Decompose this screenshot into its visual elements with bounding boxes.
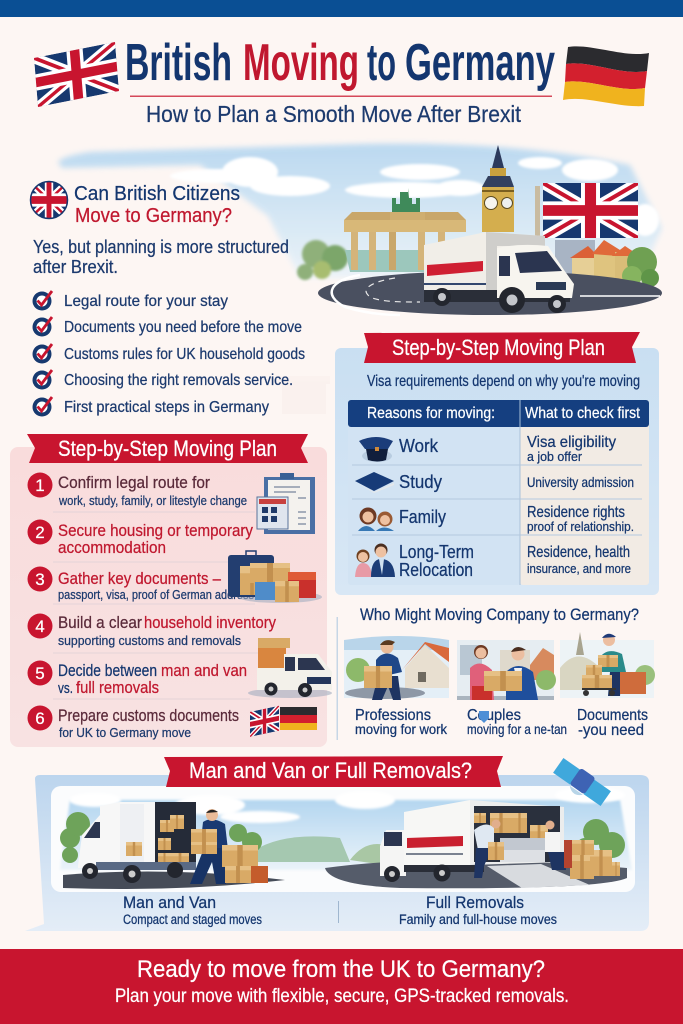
icon: clipboard and calendar (257, 473, 315, 534)
panel: step-by-step moving plan, left (10, 434, 332, 747)
step 2: Secure housing or temporary (58, 521, 253, 540)
ribbon heading: Step-by-Step Moving Plan (58, 436, 277, 461)
ribbon heading: Man and Van or Full Removals? (189, 758, 472, 783)
step 3: 3 (35, 570, 45, 589)
step 6: for UK to Germany move (59, 725, 191, 740)
label: documents (577, 707, 648, 739)
image: couple with box (457, 640, 556, 700)
row: long-term relocation: Long-Term (399, 542, 474, 562)
step 5: man and van (161, 661, 247, 680)
checklist: Customs rules for UK household goods (64, 346, 305, 363)
top bar (0, 0, 683, 17)
hero illustration: landmarks and truck (58, 144, 662, 315)
step 3: Gather key documents – (58, 569, 221, 588)
title text: to (367, 34, 396, 92)
panel: can British citizens move (28, 180, 305, 416)
step 4: supporting customs and removals (58, 633, 241, 648)
row: study (355, 472, 634, 493)
option: man and van (123, 893, 262, 927)
step 1: work, study, family, or litestyle change (58, 493, 247, 508)
label: couples: moving for a ne-tan (467, 721, 567, 737)
label: documents: -you need (578, 722, 644, 739)
step 4: Build a clear (58, 613, 142, 632)
step 3 (28, 566, 254, 602)
footer call to action: Plan your move with flexible, secure, GPS-tracked removals. (115, 986, 569, 1007)
heading: Can British Citizens (74, 183, 240, 205)
step 1 (28, 472, 247, 508)
intro text: after Brexit. (33, 257, 118, 277)
row: family: Residence rights (527, 504, 625, 521)
row: family: Family (399, 507, 446, 527)
step 6: Prepare customs documents (58, 706, 239, 725)
step 2: 2 (35, 523, 45, 542)
step 5: Decide between (58, 661, 157, 680)
faint building watermark (278, 376, 330, 414)
row: long-term relocation: Relocation (399, 560, 473, 580)
heading: Move to Germany? (75, 205, 232, 227)
label: professions (355, 707, 448, 737)
houses and trees right (555, 240, 659, 287)
icon: UK flag (34, 42, 119, 107)
step 4: 4 (35, 617, 45, 636)
icon: suitcase and boxes (228, 551, 322, 603)
icon: German flag (563, 46, 649, 106)
option: full removals (399, 893, 557, 927)
step 6: 6 (35, 709, 45, 728)
panel: who might move (336, 605, 655, 740)
checklist (32, 291, 305, 416)
icon: UK globe (28, 180, 70, 220)
table (348, 400, 649, 585)
footer call to action (0, 949, 683, 1024)
title text: British (125, 34, 232, 92)
title text (125, 34, 555, 92)
footer call to action: Ready to move from the UK to Germany? (137, 956, 545, 983)
icon: UK and German flags (250, 706, 317, 737)
step 4: household inventory (144, 613, 276, 632)
ribbon heading: Step-by-Step Moving Plan (392, 335, 605, 360)
step 1: Confirm legal route for (58, 473, 210, 492)
label: documents: Documents (577, 707, 648, 724)
row: long-term relocation: insurance, and more (527, 561, 631, 576)
intro text: Yes, but planning is more structured (33, 237, 289, 257)
icon: loaded van (248, 638, 332, 698)
step 2 (28, 520, 253, 557)
option: full removals: Full Removals (426, 893, 524, 912)
step 5 (28, 660, 247, 697)
option: man and van: Man and Van (123, 893, 216, 912)
label: couples (467, 707, 567, 737)
table header (367, 405, 640, 422)
row: long-term relocation: Residence, health (527, 544, 630, 561)
table header: What to check first (525, 405, 640, 422)
heading: Who Might Moving Company to Germany? (360, 605, 639, 624)
step 2: accommodation (58, 538, 166, 557)
step 5: full removals (76, 678, 159, 697)
icon: satellite (550, 756, 612, 810)
step 5: vs. (58, 680, 73, 697)
van, man with boxes (78, 802, 268, 884)
subtitle: How to Plan a Smooth Move After Brexit (146, 101, 522, 127)
trees left (297, 240, 348, 280)
checklist: First practical steps in Germany (64, 399, 269, 416)
row: study: University admission (527, 474, 634, 490)
table header: Reasons for moving: (367, 405, 495, 422)
truck (424, 232, 574, 313)
title block (34, 34, 649, 127)
label: professions: Professions (355, 707, 431, 724)
step 1: 1 (35, 476, 45, 495)
image: worker with trolley (560, 632, 655, 698)
title text: Germany (405, 34, 555, 92)
truck, workers, ramp, boxes (380, 800, 620, 888)
panel: visa reasons table, right (335, 332, 659, 595)
checklist: Legal route for your stay (64, 293, 228, 310)
label: couples: Couples (467, 707, 521, 724)
step 6 (28, 706, 239, 740)
row: work: a job offer (527, 449, 583, 464)
intro text (33, 237, 289, 277)
title text: Moving (243, 34, 359, 92)
row: work: Visa eligibility (527, 434, 616, 451)
row: family (358, 504, 634, 534)
option: full removals: Family and full-house moves (399, 912, 557, 927)
row: work: Work (399, 436, 439, 456)
step 5: 5 (35, 664, 45, 683)
panel: man and van or full removals (25, 756, 649, 931)
row: family: proof of relationship. (527, 519, 634, 534)
checklist: Choosing the right removals service. (64, 372, 293, 389)
road (318, 271, 662, 315)
UK flag on pole (543, 183, 638, 238)
row: long-term relocation (355, 542, 631, 580)
row: work (359, 434, 616, 464)
Big Ben (482, 145, 540, 236)
checklist: Documents you need before the move (64, 319, 302, 336)
step 4 (28, 613, 276, 648)
option: man and van: Compact and staged moves (123, 912, 262, 927)
heading (74, 183, 240, 227)
step 3: passport, visa, proof of German address (58, 587, 254, 602)
Brandenburg gate (344, 188, 466, 270)
image: professional carrying boxes (344, 636, 449, 700)
scene illustration (51, 786, 635, 892)
row: study: Study (399, 472, 442, 492)
label: professions: moving for work (355, 721, 448, 737)
